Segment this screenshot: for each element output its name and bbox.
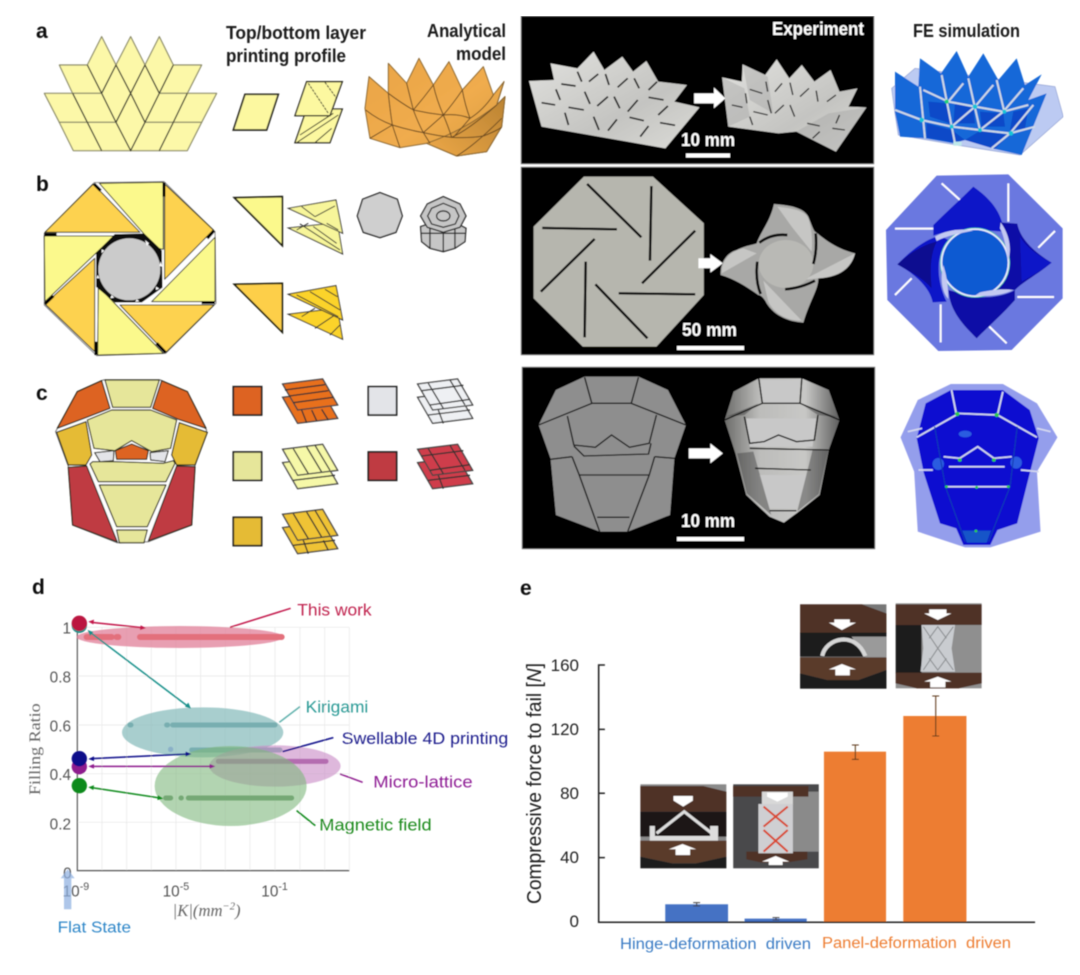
x axis title: ) xyxy=(234,901,241,920)
diagram a: single panel profile xyxy=(233,94,278,130)
flat and folded samples a xyxy=(529,52,866,152)
chart e: compressive force bars xyxy=(524,603,1035,953)
chart d: filling ratio vs curvature xyxy=(27,600,508,937)
panel label a: a xyxy=(36,20,48,43)
series labels: This work xyxy=(297,600,372,619)
diagram b: yellow triangle layers xyxy=(288,200,343,254)
photo: hinge test 2 xyxy=(733,784,819,868)
x tick labels: -9 xyxy=(80,881,89,893)
photo panel b: experiment xyxy=(521,167,874,355)
panel label b: b xyxy=(36,173,49,196)
photo: panel test 1 xyxy=(800,604,886,689)
group label: panel: Panel-deformation driven xyxy=(822,935,1011,952)
heading: analytical model: Analytical xyxy=(427,21,506,41)
x axis title: |K|(mm xyxy=(173,901,223,920)
series ellipse: micro-lattice xyxy=(209,745,341,787)
photo panel a: experiment xyxy=(521,16,874,164)
y tick labels: 0.2 xyxy=(50,816,71,833)
diagram a: analytical model orange surface xyxy=(365,58,505,156)
y tick labels: 0 xyxy=(63,865,72,882)
x tick labels: -5 xyxy=(180,881,189,893)
y tick labels: 120 xyxy=(551,720,579,739)
flat and folded mask samples xyxy=(539,377,840,532)
diagram b: orange triangle profile xyxy=(234,283,282,332)
heading: FE simulation: FE simulation xyxy=(913,21,1020,41)
scale bar 50 mm: 50 mm xyxy=(682,320,737,340)
diagram c: layered printing stacks xyxy=(283,379,473,554)
y axis title: Compressive force to fail [N] xyxy=(524,663,546,904)
series labels: Magnetic field xyxy=(319,816,432,835)
x axis title: −2 xyxy=(223,901,236,912)
y tick labels: 0.6 xyxy=(50,718,71,735)
FE simulation c xyxy=(901,384,1057,547)
connector arrows xyxy=(88,620,215,800)
flat state label: Flat State xyxy=(58,920,131,937)
y tick labels: 160 xyxy=(551,656,579,675)
group label: hinge: Hinge-deformation driven xyxy=(620,936,811,953)
diagram c: panel material swatches xyxy=(233,387,397,546)
panel label d: d xyxy=(32,576,45,599)
y tick labels: 80 xyxy=(560,784,579,803)
leader lines xyxy=(230,608,363,826)
x tick labels: -1 xyxy=(278,881,288,893)
photo: hinge test 1 xyxy=(640,784,726,868)
y tick labels: 0.8 xyxy=(50,670,71,687)
y tick labels: 0 xyxy=(570,912,579,931)
y tick labels xyxy=(551,656,579,931)
series labels: Kirigami xyxy=(306,698,368,717)
y axis title: Filling Ratio xyxy=(27,703,44,795)
scale bar 10 mm: 10 mm xyxy=(681,511,735,531)
diagram a: top and bottom layer stack xyxy=(295,82,342,143)
diagram b: yellow triangle profile xyxy=(234,197,282,246)
series ellipse: magnetic field xyxy=(155,746,307,826)
series labels xyxy=(297,600,508,835)
series labels: Micro-lattice xyxy=(373,772,473,791)
photo panel c: experiment xyxy=(522,367,875,549)
series ellipse: this work xyxy=(77,626,283,648)
scale bar 50 mm xyxy=(677,320,744,350)
diagram b: grey concentric octagon stack xyxy=(421,197,466,252)
diagram b: grey octagon profile xyxy=(357,193,402,238)
y tick labels: 40 xyxy=(560,848,579,867)
flat-state points xyxy=(72,616,87,793)
x tick labels: 10 xyxy=(261,884,278,901)
flat octagon sample xyxy=(534,177,723,347)
bars xyxy=(599,665,1035,922)
diagram a: flat rhombus kirigami pattern xyxy=(44,37,217,151)
y tick labels xyxy=(50,620,72,882)
heading: printing profile: printing profile xyxy=(226,46,346,66)
scale bar 10 mm: 10 mm xyxy=(681,130,735,150)
diagram c: iron-man mask pattern xyxy=(56,380,207,543)
x tick labels: 10 xyxy=(63,884,80,901)
heading: printing profile: Top/bottom layer xyxy=(226,23,366,43)
diagram b: octagonal pinwheel pattern xyxy=(44,182,216,356)
x tick labels xyxy=(63,881,288,901)
panel label e: e xyxy=(520,577,532,600)
y tick labels: 0.4 xyxy=(50,767,71,784)
series ellipse: kirigami xyxy=(122,707,283,757)
grid xyxy=(77,627,349,871)
scale bar 10 mm xyxy=(681,130,735,158)
axes xyxy=(77,627,349,871)
x tick labels: 10 xyxy=(163,884,180,901)
scale bar 10 mm xyxy=(677,511,744,541)
diagram b: orange triangle layers xyxy=(288,286,343,339)
photo: panel test 2 xyxy=(896,603,982,688)
flat state arrow xyxy=(61,869,75,909)
heading: analytical model xyxy=(427,21,506,64)
series labels: Swellable 4D printing xyxy=(342,729,508,748)
y tick labels: 1 xyxy=(62,620,71,637)
heading: analytical model: model xyxy=(456,44,506,64)
FE simulation b xyxy=(886,174,1063,351)
folded pinwheel sample xyxy=(721,204,855,323)
heading: printing profile xyxy=(226,23,366,66)
FE simulation a xyxy=(892,51,1063,155)
panel label c: c xyxy=(36,382,48,405)
experiment heading: Experiment xyxy=(772,19,864,39)
